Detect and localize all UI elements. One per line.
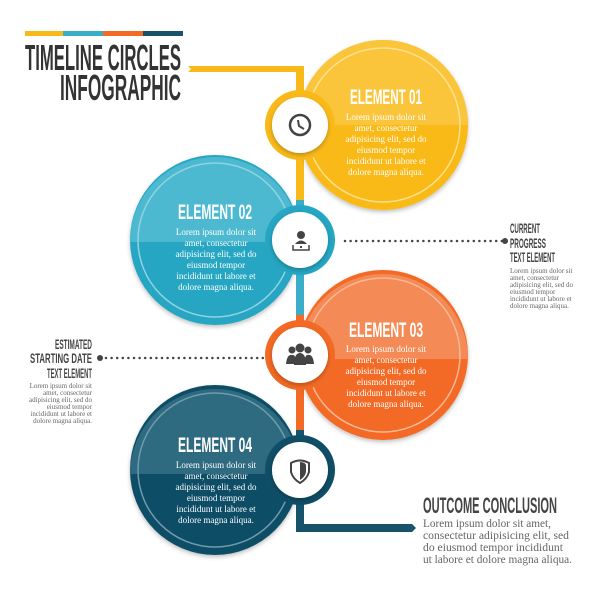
outcome conclusion: Lorem ipsum dolor sit amet, [423,518,551,530]
outcome conclusion: consectetur adipisicing elit, sed [423,530,569,542]
circle: element 04: amet, consectetur [185,471,247,481]
side text: estimated starting date [29,336,93,425]
circle: element 02: incididunt ut labore et [176,271,256,281]
icon node: person at desk [265,205,335,275]
circle: element 02 [130,155,300,325]
text: INFOGRAPHIC [60,67,181,108]
circle: element 02: Lorem ipsum dolor sit [176,227,257,237]
circle: element 01: dolore magna aliqua. [348,167,424,177]
circle: element 02: adipisicing elit, sed do [176,249,257,259]
side text: current progress: Lorem ipsum dolor sit [510,267,572,275]
circle: element 01: adipisicing elit, sed do [346,134,427,144]
dotted leader: estimated starting date [97,355,264,361]
side text: estimated starting date: Lorem ipsum dolor sit [30,382,92,390]
side text: current progress [510,220,573,310]
circle: element 04: eiusmod tempor [187,493,245,503]
side text: current progress: adipisicing elit, sed do [510,281,573,289]
side text: estimated starting date: adipisicing elit, sed do [29,396,92,404]
circle: element 03: dolore magna aliqua. [348,399,424,409]
circle: element 02: ELEMENT 02 [178,201,252,224]
title color bar [25,31,183,36]
side text: current progress: eiusmod tempor [510,288,556,296]
circle: element 01: ELEMENT 01 [350,86,422,109]
circle: element 03: eiusmod tempor [357,377,415,387]
icon node: clock [265,90,335,160]
circle: element 03: incididunt ut labore et [346,388,426,398]
icon node: shield [265,435,335,505]
outcome conclusion: do eiusmod tempor incididunt [423,542,564,554]
circle: element 02: eiusmod tempor [187,260,245,270]
circle: element 01: incididunt ut labore et [346,156,426,166]
title [25,37,181,108]
circle: element 04: Lorem ipsum dolor sit [176,460,257,470]
side text: current progress: PROGRESS [510,235,546,251]
circle: element 04: adipisicing elit, sed do [176,482,257,492]
circle: element 03: Lorem ipsum dolor sit [346,344,427,354]
icon node: team [265,320,335,390]
circle: element 03: ELEMENT 03 [349,319,423,342]
circle: element 02: amet, consectetur [185,238,247,248]
circle: element 04: incididunt ut labore et [176,504,256,514]
outcome conclusion [423,493,572,566]
circle: element 01 [298,40,468,210]
circle: element 03: amet, consectetur [355,355,417,365]
side text: current progress: dolore magna aliqua. [510,302,569,310]
side text: estimated starting date: eiusmod tempor [47,403,93,411]
dotted leader: current progress [345,238,508,244]
text: TIMELINE CIRCLES [25,37,181,78]
side text: estimated starting date: incididunt ut labore et [30,410,92,418]
side text: current progress: CURRENT [510,220,540,236]
circle: element 03: adipisicing elit, sed do [346,366,427,376]
circle: element 01: Lorem ipsum dolor sit [346,112,427,122]
circle: element 04: dolore magna aliqua. [178,515,254,525]
side text: estimated starting date: amet, consectetur [43,389,93,397]
side text: current progress: amet, consectetur [510,274,560,282]
side text: estimated starting date: STARTING DATE [30,350,92,366]
circle: element 04: ELEMENT 04 [178,434,252,457]
circle: element 03 [298,270,468,440]
side text: current progress: incididunt ut labore et [510,295,572,303]
circle: element 04 [130,385,300,555]
circle: element 02: dolore magna aliqua. [178,282,254,292]
side text: estimated starting date: dolore magna aliqua. [33,417,92,425]
outcome conclusion: ut labore et dolore magna aliqua. [423,554,572,566]
text: TEXT ELEMENT [47,365,92,381]
circle: element 01: eiusmod tempor [357,145,415,155]
circle: element 01: amet, consectetur [355,123,417,133]
text: ESTIMATED [55,336,92,352]
connector lines / spine [188,66,416,532]
